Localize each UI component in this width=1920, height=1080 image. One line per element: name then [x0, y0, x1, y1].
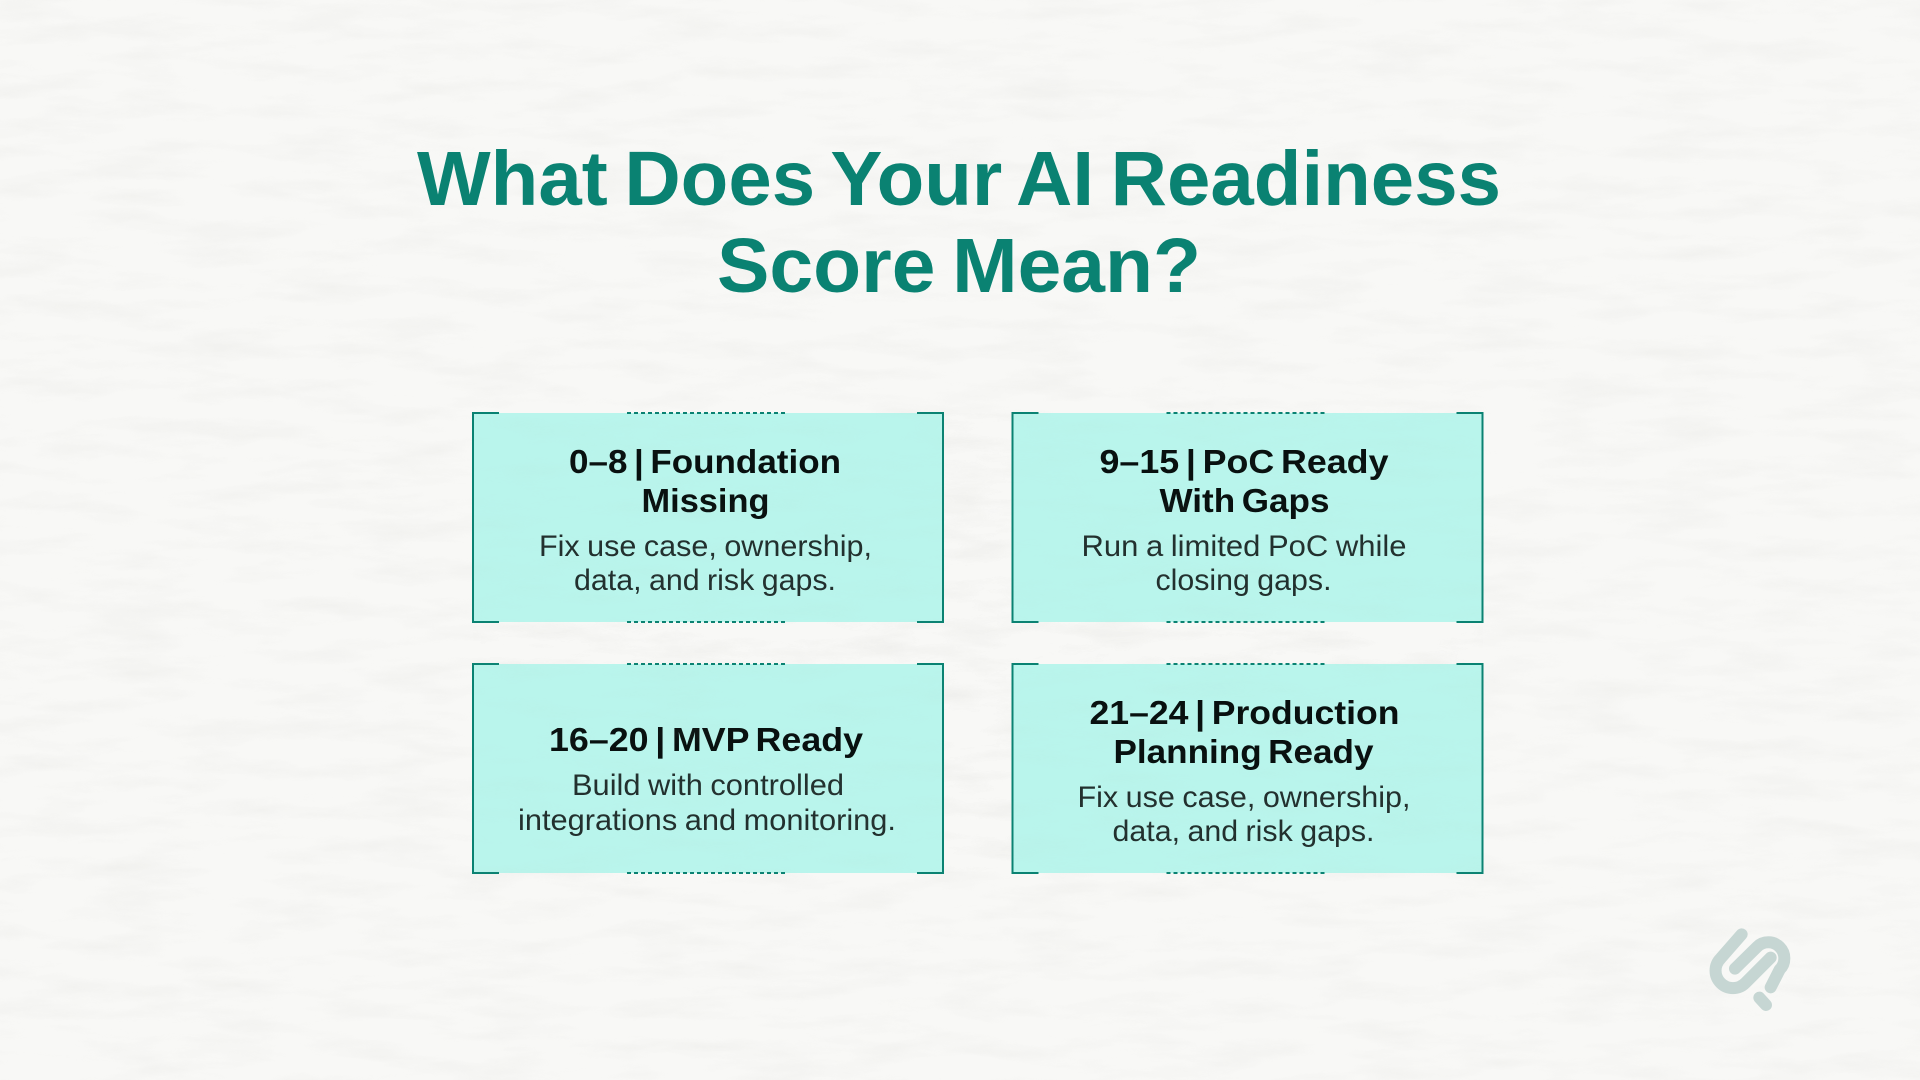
- description: Fix use case, ownership,: [1078, 781, 1410, 814]
- title: Score Mean?: [717, 223, 1201, 309]
- heading: 21–24 Production Planning Ready: [1090, 694, 1400, 770]
- heading: 0–8 Foundation Missing: 0–8 | Foundation: [569, 443, 841, 480]
- heading: 9–15 PoC Ready With Gaps: With Gaps: [1160, 482, 1330, 519]
- description: [539, 530, 872, 597]
- panel: score 9–15: [1012, 413, 1482, 622]
- description: Fix use case, ownership,: [539, 530, 872, 563]
- heading: 0–8 Foundation Missing: [569, 443, 841, 519]
- icon: logo: [1716, 934, 1784, 1005]
- description: Run a limited PoC while: [1082, 530, 1407, 563]
- description: [1078, 781, 1410, 848]
- panel: score 0–8: [473, 413, 943, 622]
- description: data, and risk gaps.: [1112, 815, 1374, 848]
- title: [417, 136, 1501, 309]
- heading: 21–24 Production Planning Ready: Planning Ready: [1114, 733, 1374, 770]
- texture over panels: [473, 413, 1483, 873]
- heading: 0–8 Foundation Missing: Missing: [642, 482, 770, 519]
- title: What Does Your AI Readiness: [417, 136, 1501, 222]
- description: [1082, 530, 1406, 597]
- heading: 9–15 PoC Ready With Gaps: [1100, 443, 1389, 519]
- heading: 16–20 MVP Ready: 16–20 | MVP Ready: [549, 721, 864, 758]
- description: Build with controlled: [572, 769, 844, 802]
- heading: 9–15 PoC Ready With Gaps: 9–15 | PoC Ready: [1100, 443, 1389, 480]
- description: integrations and monitoring.: [518, 804, 896, 837]
- description: closing gaps.: [1156, 564, 1332, 597]
- panel: score 16–20: [473, 664, 943, 873]
- description: data, and risk gaps.: [574, 564, 836, 597]
- panel: score 21–24: [1012, 664, 1482, 873]
- description: [518, 769, 896, 837]
- heading: 21–24 Production Planning Ready: 21–24 | Production: [1090, 694, 1400, 731]
